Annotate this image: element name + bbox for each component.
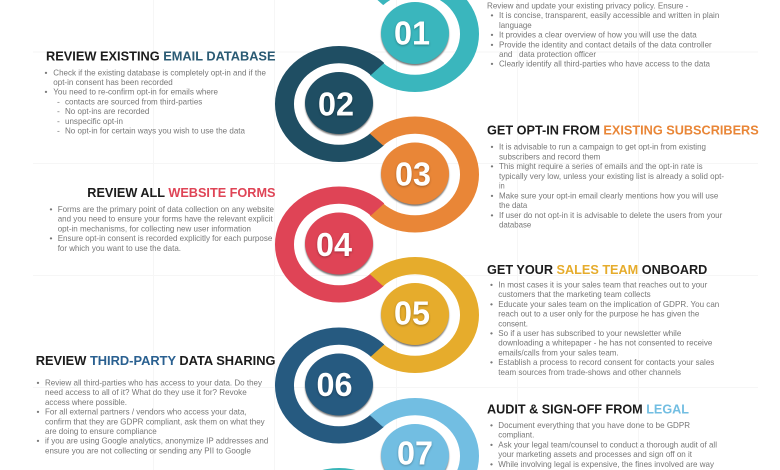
bullet list: confirm that they are GDPR compliant, ask them on what they [45, 416, 265, 426]
step 07 ring [370, 398, 479, 470]
bullet list: subscribers and record them [499, 151, 600, 161]
bullet list: compliant. [498, 430, 534, 440]
heading: REVIEW THIRD-PARTY DATA SHARING [36, 353, 276, 368]
heading: REVIEW ALL WEBSITE FORMS [87, 185, 276, 200]
heading: GET YOUR SALES TEAM ONBOARD [487, 262, 707, 277]
panel: step 03 existing subscribers [487, 122, 759, 230]
bullet list: Ask your legal team/counsel to conduct a thorough audit of all [498, 439, 717, 449]
bullet list: - [57, 96, 60, 106]
bullet list: downloading a whitepaper - he has not consented to receive [498, 338, 713, 348]
bullet list: for which you want to use the data. [58, 243, 181, 253]
panel: step 01 privacy policy: Review and update your existing privacy policy. Ensure - [487, 0, 688, 10]
panel: step 01 privacy policy: • [490, 59, 494, 69]
bullet list: Forms are the primary point of data collection on any website [58, 204, 274, 214]
step 03 ring [370, 116, 479, 232]
step 06 ring [275, 328, 384, 444]
bullet list: your marketing assets and processes and sign off on it [498, 449, 693, 459]
bullet list: So if a user has subscribed to your newsletter while [498, 328, 682, 338]
bullet list: No opt-in for certain ways you wish to use the data [65, 126, 245, 136]
step 03 ring: 03 [395, 156, 431, 192]
panel: step 02 email database [44, 48, 276, 136]
bullet list: While involving legal is expensive, the fines involved are way [498, 459, 715, 469]
panel: step 06 third-party data sharing [36, 353, 276, 456]
panel: step 01 privacy policy: language [499, 20, 532, 30]
bullet list: This might require a series of emails and the opt-in rate is [499, 161, 703, 171]
bullet list [490, 142, 724, 230]
bullet list: and you need to ensure your forms have the relevant explicit [58, 214, 273, 224]
panel: step 01 privacy policy: • [490, 30, 494, 40]
bullet list: • [50, 204, 52, 214]
bullet list: • [50, 233, 52, 243]
bullet list: customers that the marketing team collects [498, 289, 651, 299]
step 05 ring [370, 257, 479, 373]
bullet list: Establish a process to record consent for contacts your sales [498, 357, 714, 367]
bullet list: are doing to ensure compliance [45, 426, 157, 436]
step 06 ring: 06 [316, 366, 352, 403]
bullet list [50, 204, 274, 253]
bullet list: the data [499, 200, 528, 210]
panel: step 01 privacy policy [487, 0, 720, 69]
step 02 ring [275, 46, 384, 162]
bullet list: • [490, 161, 494, 171]
bullet list: If user do not opt-in it is advisable to delete the users from your [499, 210, 722, 220]
bullet list: if you are using Google analytics, anonymize IP addresses and [45, 436, 269, 446]
bullet list: • [44, 87, 48, 97]
bullet list: • [490, 328, 493, 338]
step 05 ring: 05 [394, 294, 430, 332]
panel: step 01 privacy policy: It provides a clear overview of how you will use the data [499, 30, 697, 40]
bullet list: opt-in mechanisms, for collecting new user information [58, 223, 251, 233]
bullet list: • [490, 299, 493, 309]
bullet list: consent. [498, 318, 528, 328]
bullet list: contacts are sourced from third-parties [65, 96, 202, 106]
bullet list: emails/calls from your sales team. [498, 348, 619, 358]
panel: step 01 privacy policy: Clearly identify all third-parties who have access to the data [499, 59, 710, 69]
bullet list: • [490, 190, 494, 200]
bullet list: unspecific opt-in [65, 116, 123, 126]
heading: REVIEW EXISTING EMAIL DATABASE [46, 48, 276, 63]
bullet list: In most cases it is your sales team that reaches out to your [498, 279, 707, 289]
bullet list: Make sure your opt-in email clearly mentions how you will use [499, 190, 719, 200]
panel: step 01 privacy policy: • [490, 10, 494, 20]
step 02 ring: 02 [318, 86, 354, 122]
bullet list: - [57, 116, 60, 126]
bullet list: database [499, 220, 532, 230]
bullet list: • [36, 407, 40, 417]
panel: step 01 privacy policy: • [490, 39, 494, 49]
bullet list: You need to re-confirm opt-in for emails where [53, 87, 218, 97]
step 04 ring [275, 186, 384, 302]
bullet list: • [36, 377, 40, 387]
bullet list: • [490, 210, 494, 220]
bullet list: Document everything that you have done to be GDPR [498, 420, 690, 430]
panel: step 07 legal sign-off [487, 402, 717, 469]
bullet list: • [490, 420, 493, 430]
bullet list: in [499, 181, 505, 191]
bullet list [44, 67, 266, 136]
bullet list: - [57, 106, 60, 116]
bullet list: Check if the existing database is completely opt-in and if the [53, 67, 266, 77]
bullet list: - [57, 126, 60, 136]
heading: GET OPT-IN FROM EXISTING SUBSCRIBERS [487, 122, 759, 137]
panel: step 01 privacy policy: It is concise, transparent, easily accessible and written in plain [499, 10, 720, 20]
bullet list: It is advisable to run a campaign to get opt-in from existing [499, 142, 706, 152]
bullet list: need access to all of it? What do they use it for? Revoke [45, 387, 247, 397]
bullet list: • [490, 459, 493, 469]
bullet list: No opt-ins are recorded [65, 106, 150, 116]
bullet list [490, 279, 720, 377]
bullet list: Review all third-parties who has access to your data. Do they [45, 377, 263, 387]
step 04 ring: 04 [316, 226, 353, 263]
panel: step 01 privacy policy: Provide the identity and contact details of the data controller [499, 39, 712, 49]
heading: AUDIT & SIGN-OFF FROM LEGAL [487, 402, 689, 417]
step 08 ring (cropped) [275, 468, 384, 470]
bullet list: • [490, 439, 493, 449]
bullet list: • [490, 357, 493, 367]
bullet list: team sources from trade-shows and other channels [498, 367, 681, 377]
bullet list: • [490, 142, 494, 152]
bullet list: opt-in consent has been recorded [53, 77, 173, 87]
bullet list: ensure you are not collecting or sending any PII to Google [45, 446, 251, 456]
bullet list: • [490, 279, 493, 289]
bullet list: Ensure opt-in consent is recorded explicitly for each purpose [58, 233, 273, 243]
panel: step 05 sales team [487, 262, 720, 377]
bullet list: typically very low, unless your existing list is already a solid opt- [499, 171, 724, 181]
panel: step 01 privacy policy: and data protection officer [499, 49, 596, 59]
bullet list [490, 420, 717, 469]
step 01 ring [370, 0, 479, 92]
bullet list: • [36, 436, 40, 446]
panel: step 04 website forms [50, 185, 276, 253]
bullet list: For all external partners / vendors who access your data, [45, 407, 247, 417]
step 01 ring: 01 [394, 14, 430, 52]
bullet list: Educate your sales team on the implication of GDPR. You can [498, 299, 720, 309]
bullet list [36, 377, 269, 456]
bullet list: access where possible. [45, 397, 127, 407]
bullet list: reach out to a user only for the purpose he has given the [498, 309, 700, 319]
bullet list: • [44, 67, 48, 77]
